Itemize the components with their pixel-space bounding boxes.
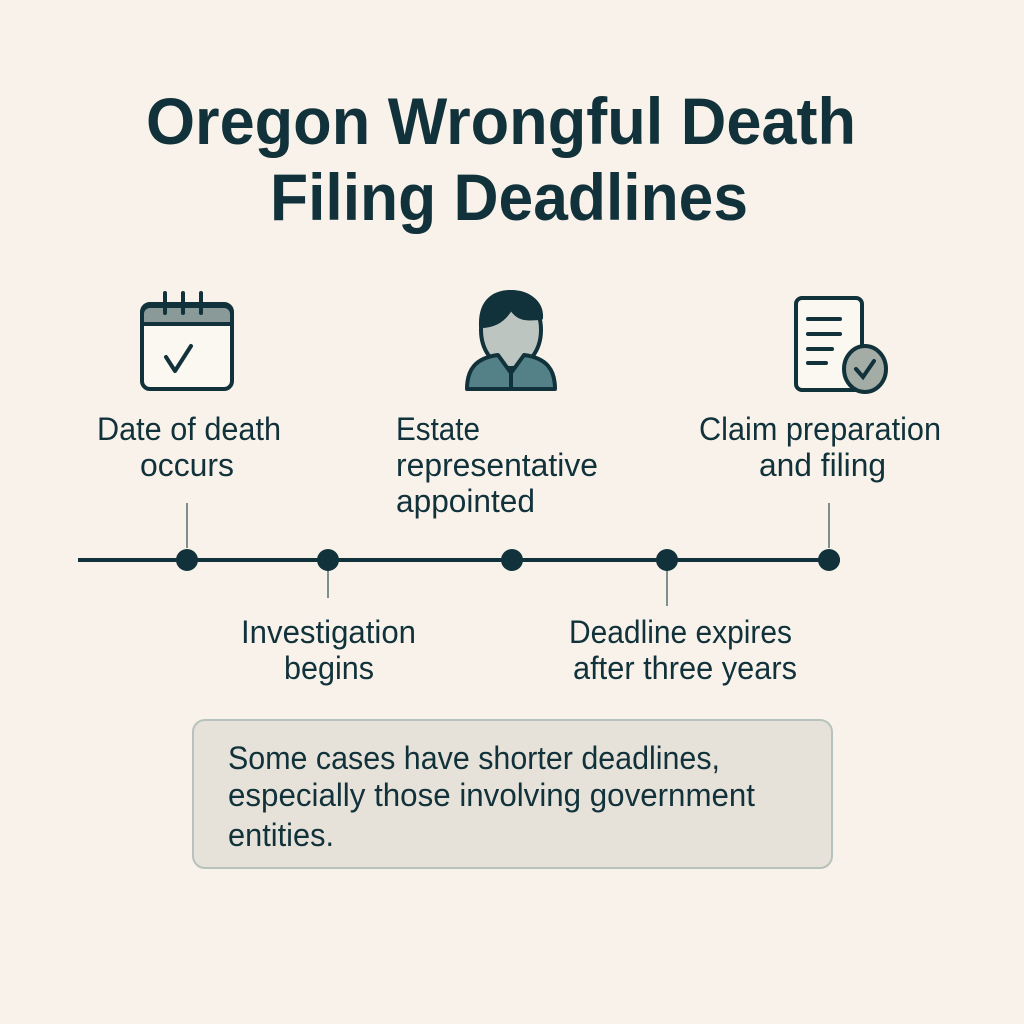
label: deadline expires: Deadline expires — [569, 614, 792, 650]
label: claim preparation: and filing — [759, 447, 886, 483]
label: estate representative — [396, 411, 598, 519]
timeline — [78, 503, 840, 606]
label: investigation: Investigation — [241, 614, 416, 650]
label: date of death: occurs — [140, 447, 234, 483]
callout: especially those involving government — [228, 777, 755, 813]
label: deadline expires: after three years — [573, 650, 797, 686]
label: estate representative: appointed — [396, 483, 535, 519]
icon: document with check — [796, 298, 886, 392]
label: deadline expires — [569, 614, 797, 686]
callout: Some cases have shorter deadlines, — [228, 740, 720, 776]
callout — [193, 720, 832, 868]
label: investigation — [241, 614, 416, 686]
title — [146, 84, 856, 234]
label: investigation: begins — [284, 650, 374, 686]
label: date of death: Date of death — [97, 411, 281, 447]
callout: entities. — [228, 817, 334, 853]
label: date of death — [97, 411, 281, 483]
icon: calendar — [142, 293, 232, 389]
label: estate representative: representative — [396, 447, 598, 483]
icon: person — [467, 292, 555, 389]
title: Filing Deadlines — [270, 160, 748, 234]
title: Oregon Wrongful Death — [146, 84, 856, 158]
label: claim preparation — [699, 411, 941, 483]
label: estate representative: Estate — [396, 411, 480, 447]
label: claim preparation: Claim preparation — [699, 411, 941, 447]
